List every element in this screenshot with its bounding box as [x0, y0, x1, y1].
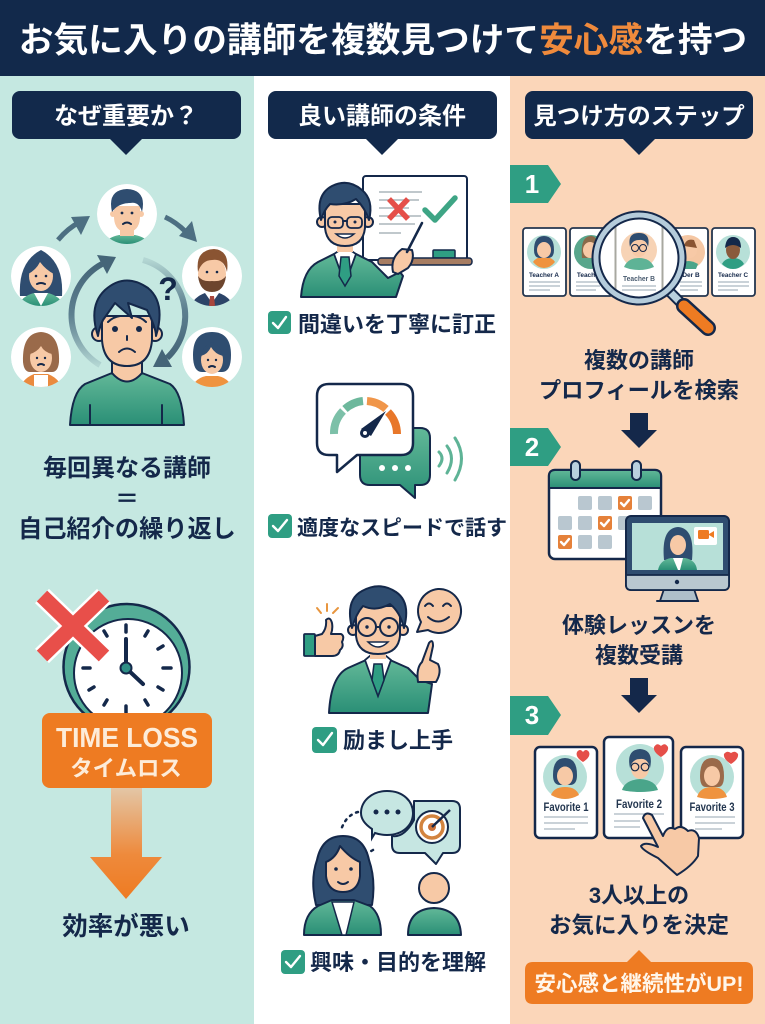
illustration: teacher profile search: [523, 212, 755, 328]
heading: なぜ重要か: なぜ重要か？: [54, 103, 198, 130]
text: 3人以上のお気に入りを決定: 3人以上の: [589, 883, 689, 908]
label: 興味・目的を理解: 興味・目的を理解: [310, 950, 486, 975]
title: [0, 0, 765, 76]
callout: 安心感と継続性がUP: 安心感と継続性がUP!: [534, 971, 744, 996]
icon: speech bubble with dots: [361, 791, 413, 838]
callout: TIME LOSS: [42, 713, 212, 788]
heading: なぜ重要か: [12, 91, 241, 155]
icon: sound waves: [439, 438, 462, 480]
icon: green chat bubble: [360, 428, 430, 498]
callout: TIME LOSS: TIME LOSS: [56, 722, 198, 753]
heading: 良い講師の条件: [268, 91, 497, 155]
arrow: step 2 to step 3: [621, 678, 657, 713]
label: 適度なスピードで話す: 適度なスピードで話す: [297, 517, 507, 540]
arrow: right curved: [143, 260, 185, 367]
step badge 2: [510, 428, 561, 466]
text: 効率が悪い: 効率が悪い: [62, 912, 190, 941]
callout: TIME LOSS: タイムロス: [70, 756, 182, 781]
icon: dotted connector: [341, 812, 373, 854]
text: 3人以上のお気に入りを決定: お気に入りを決定: [549, 913, 729, 938]
illustration: teacher correcting on whiteboard: [301, 176, 472, 297]
step badge 2: 2: [525, 432, 539, 462]
card: Favorite 3: Favorite 3: [690, 802, 734, 814]
text: 毎回異なる講師 = 自己紹介の繰り返し: 自己紹介の繰り返し: [18, 516, 236, 543]
step badge 3: [510, 696, 561, 735]
title: お気に入りの講師を複数見つけて安心感を持つ: [19, 21, 747, 60]
icon: central worried learner: [70, 280, 184, 425]
heading: 良い講師の条件: 良い講師の条件: [298, 103, 466, 130]
illustration: confused learner with rotating teachers: [11, 184, 242, 425]
icon: clock with cross: [42, 596, 190, 730]
icon: teacher avatar top: [97, 184, 157, 244]
text: 毎回異なる講師 = 自己紹介の繰り返し: [18, 455, 236, 543]
icon: gauge bubble: [317, 384, 413, 472]
card: Teacher C: Teacher C: [718, 272, 748, 279]
card: Teacher fourth: Der B: [682, 272, 700, 279]
arrow: step 1 to step 2: [621, 413, 657, 448]
panel: background left column: [0, 76, 254, 1024]
icon: smiling teacher: [301, 183, 422, 297]
illustration: understanding interests and goals: [304, 791, 461, 935]
text: 毎回異なる講師 = 自己紹介の繰り返し: ＝: [115, 486, 139, 513]
illustration: speech speed gauge: [317, 384, 462, 498]
arrow: top avatar to right avatar: [165, 217, 197, 242]
card: Teacher second: Teach: [577, 272, 595, 279]
icon: teacher: [329, 586, 440, 713]
card: Favorite 1: Favorite 1: [544, 802, 589, 814]
text: 複数の講師プロフィールを検索: [539, 348, 739, 403]
illustration: encouraging teacher: [304, 586, 461, 713]
icon: target bubble: [392, 801, 460, 864]
icon: smiling bubble: [417, 589, 461, 633]
card: Favorite 2: [604, 737, 673, 838]
icon: listener: [408, 873, 461, 935]
step badge 1: [510, 165, 561, 203]
label: 励まし上手: 励まし上手: [343, 728, 453, 753]
icon: woman: [304, 836, 381, 935]
heading: 見つけ方のステップ: 見つけ方のステップ: [533, 103, 745, 129]
illustration: choosing favorites: [535, 737, 743, 875]
card: Teacher A: [523, 228, 566, 296]
icon: question mark: ?: [158, 271, 178, 307]
card: Favorite 2: Favorite 2: [616, 797, 662, 811]
text: 複数の講師プロフィールを検索: 複数の講師: [584, 348, 694, 373]
step badge 1: 1: [525, 169, 539, 199]
heading: 見つけ方のステップ: [525, 91, 753, 155]
step badge 3: 3: [525, 700, 539, 730]
icon: pointing hand: [641, 814, 699, 875]
card: Teacher fourth: [665, 228, 708, 296]
icon: magnifying glass over Teacher B: [592, 212, 708, 328]
card: Favorite 1: [535, 747, 597, 838]
icon: magnifying glass over Teacher B: Teacher B: [623, 274, 656, 283]
label: 間違いを丁寧に訂正: 間違いを丁寧に訂正: [298, 312, 496, 337]
arrow: down to inefficiency: [90, 788, 162, 899]
panel: background right column: [510, 76, 765, 1024]
arrow: left curved: [72, 255, 116, 365]
text: 体験レッスンを複数受講: [562, 613, 716, 668]
card: Teacher second: [570, 228, 613, 296]
callout: 安心感と継続性がUP: [525, 950, 753, 1004]
text: 複数の講師プロフィールを検索: プロフィールを検索: [539, 378, 739, 403]
icon: thumbs up: [304, 604, 343, 656]
text: 体験レッスンを複数受講: 体験レッスンを: [562, 613, 716, 638]
illustration: calendar and online lesson: [549, 461, 729, 601]
icon: monitor with teacher: [626, 516, 729, 601]
text: 体験レッスンを複数受講: 複数受講: [595, 643, 683, 668]
icon: teacher avatar left upper: [11, 246, 71, 306]
icon: whiteboard: [363, 176, 472, 265]
panel: background middle column: [254, 76, 510, 1024]
card: Favorite 3: [681, 747, 743, 838]
card: Teacher A: Teacher A: [529, 272, 559, 279]
icon: teacher avatar right lower: [182, 327, 242, 387]
card: Teacher C: [712, 228, 755, 296]
icon: calendar: [549, 461, 661, 559]
arrow: left avatar to top avatar: [58, 216, 90, 240]
icon: teacher avatar right upper: [182, 246, 242, 306]
icon: teacher avatar left lower: [11, 327, 71, 387]
text: 3人以上のお気に入りを決定: [549, 883, 729, 938]
text: 毎回異なる講師 = 自己紹介の繰り返し: 毎回異なる講師: [43, 455, 211, 482]
